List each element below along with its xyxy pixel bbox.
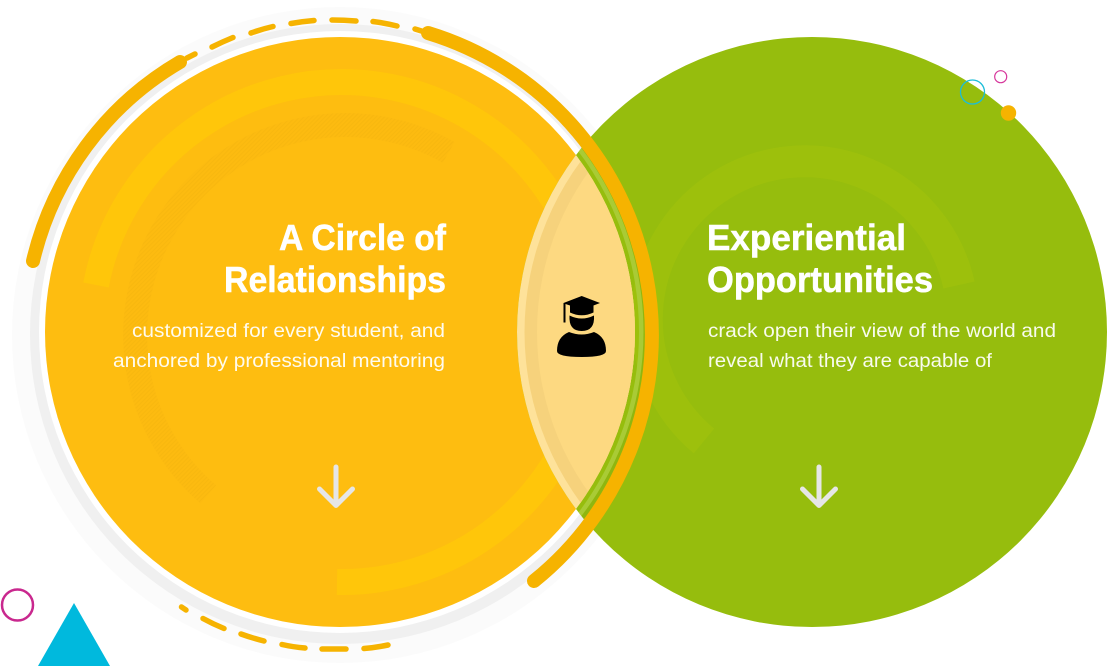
arrow: left down: [320, 467, 352, 506]
arc: dashed orange top: [187, 20, 428, 58]
heading: A Circle of Relationships: Relationships: [224, 259, 446, 300]
icon: student with graduation cap: [557, 296, 606, 357]
decoration: cyan ring upper right: [960, 80, 984, 104]
heading: A Circle of Relationships: [224, 217, 447, 300]
text: left description: anchored by professional mentoring: [113, 351, 445, 372]
heading: Experiential Opportunities: Opportunities: [707, 259, 933, 300]
panel: left circle: [45, 37, 635, 627]
decoration: orange dot: [1001, 105, 1016, 121]
heading: Experiential Opportunities: Experiential: [707, 217, 906, 258]
panel: right circle: [517, 37, 1107, 627]
arrow: right down: [802, 467, 836, 506]
decoration: cyan triangle: [38, 603, 110, 666]
heading: Experiential Opportunities: [707, 217, 933, 300]
arc: thick orange right: [428, 33, 652, 581]
text: right description: reveal what they are capable of: [708, 351, 993, 372]
panel: overlap lens: [517, 148, 645, 519]
green ring arc: [647, 161, 959, 441]
bright yellow ring arc: [96, 82, 592, 582]
text: right description: [708, 321, 1056, 372]
decoration: magenta ring lower left: [2, 590, 33, 620]
heading: A Circle of Relationships: A Circle of: [279, 217, 447, 258]
arc: thick orange upper-left: [33, 62, 180, 261]
text: left description: [113, 321, 445, 372]
panel: left circle shadow rings: [12, 7, 668, 663]
text: right description: crack open their view of the world and: [708, 321, 1056, 342]
decoration: magenta ring upper right: [995, 71, 1007, 83]
hatched ring arc: [135, 125, 449, 494]
text: left description: customized for every student, and: [132, 321, 445, 342]
arc: dashed orange bottom: [182, 607, 388, 649]
